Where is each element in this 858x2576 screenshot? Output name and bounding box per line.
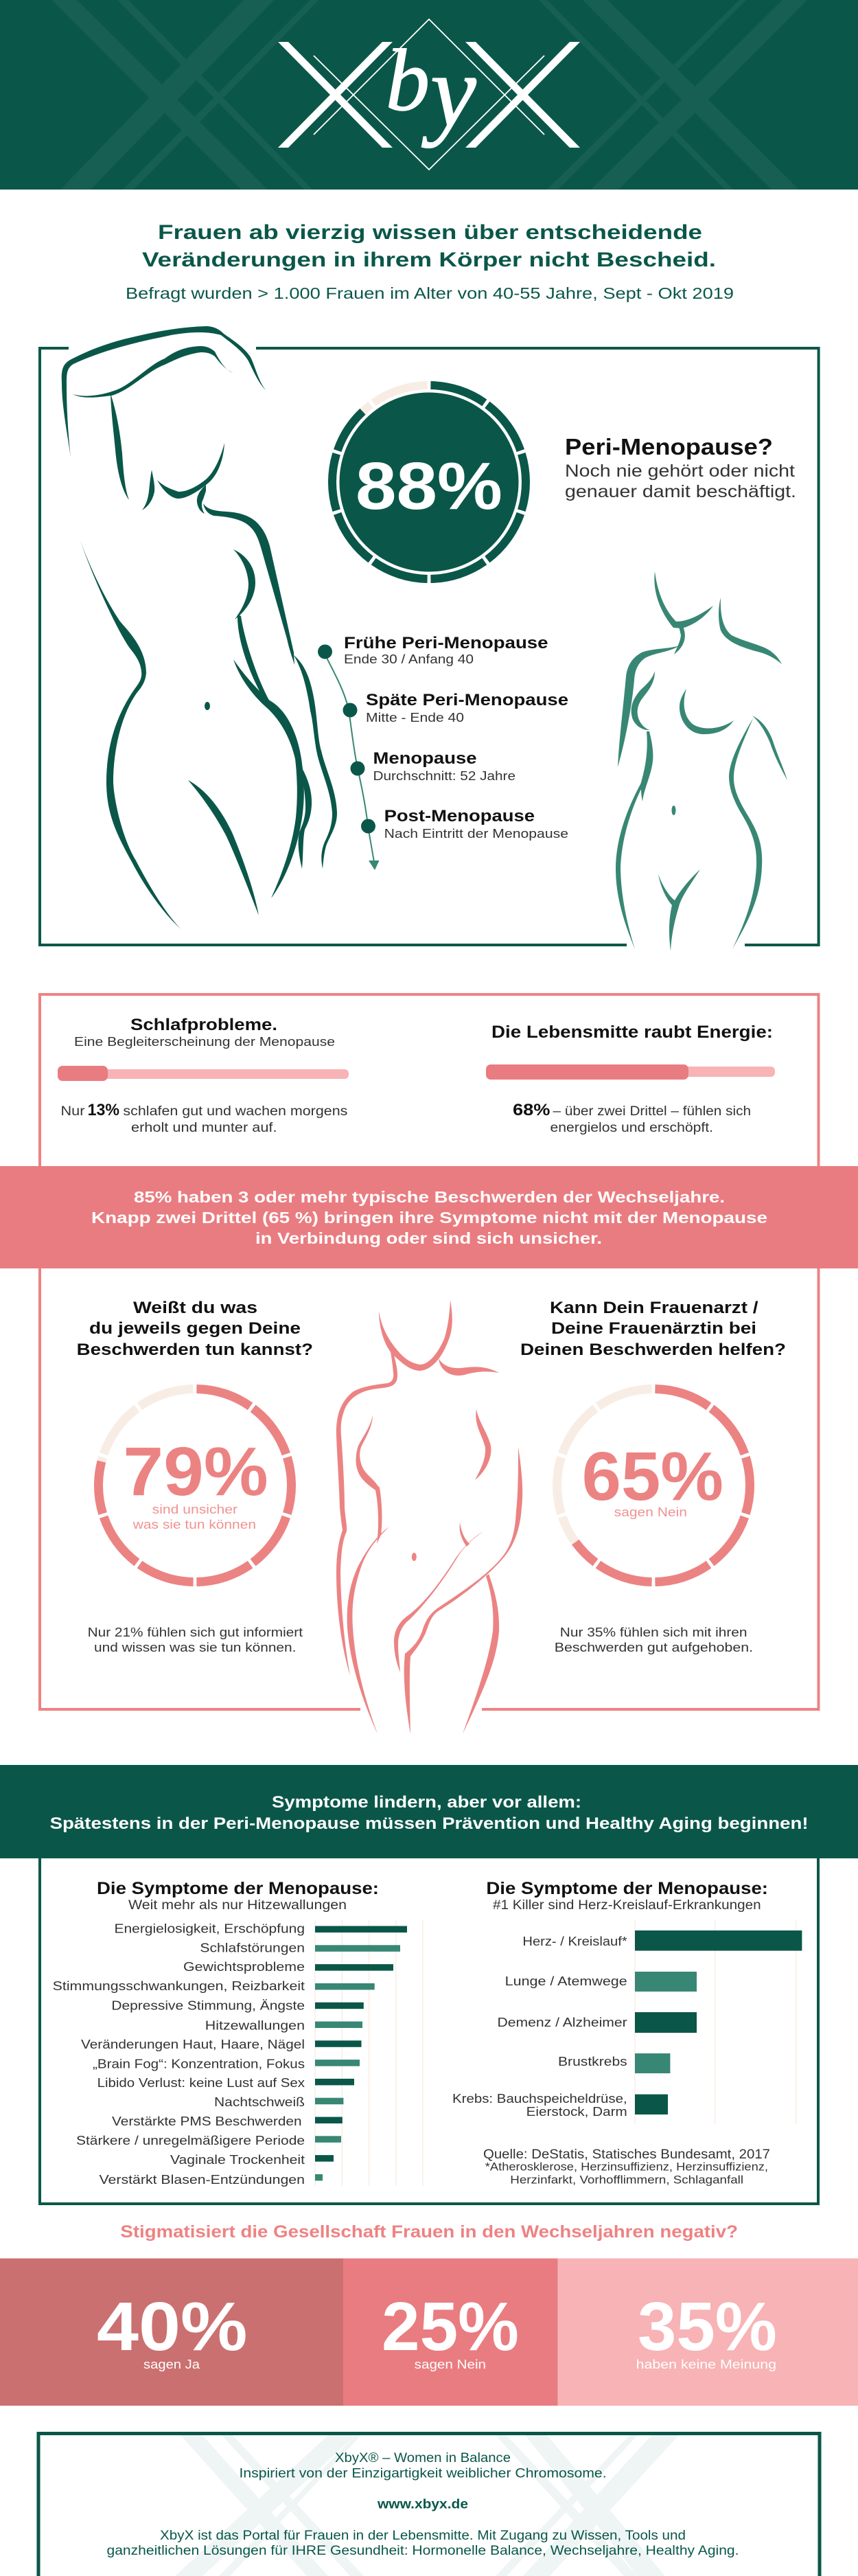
chart: Killer: Herz- / Kreislauf* — [522, 1935, 627, 1948]
question right: Kann Dein Frauenarzt / — [550, 1299, 758, 1317]
chart: Killer: #1 Killer sind Herz-Kreislauf-Erkrankungen — [493, 1898, 761, 1913]
question left: du jeweils gegen Deine — [89, 1319, 301, 1338]
banner: 85%: Knapp zwei Drittel (65 %) bringen ihre Symptome nicht mit der Menopause — [91, 1209, 767, 1227]
banner: Symptome lindern: Spätestens in der Peri-Menopause müssen Prävention und Healthy Aging beginnen! — [50, 1814, 809, 1833]
timeline: Durchschnitt: 52 Jahre — [373, 768, 515, 783]
footer text — [107, 2451, 739, 2558]
donut: 79% — [99, 1389, 291, 1582]
banner: Symptome lindern — [0, 1765, 858, 1858]
chart: Symptome der Menopause: Stimmungsschwankungen, Reizbarkeit — [53, 1979, 305, 1993]
timeline — [318, 634, 568, 870]
question left: Weißt du was — [133, 1299, 257, 1317]
note left: und wissen was sie tun können. — [94, 1641, 296, 1654]
block: Lebensmitte: Die Lebensmitte raubt Energie: — [491, 1023, 773, 1042]
donut: 79%: 79% — [123, 1433, 268, 1510]
timeline: Mitte - Ende 40 — [366, 710, 464, 725]
banner: 85%: 85% haben 3 oder mehr typische Beschwerden der Wechseljahre. — [134, 1188, 725, 1206]
timeline: Nach Eintritt der Menopause — [384, 826, 568, 841]
stat blocks — [0, 2258, 858, 2406]
title — [142, 221, 716, 271]
question right: Deine Frauenärztin bei — [551, 1319, 756, 1338]
chart: Symptome der Menopause: Stärkere / unregelmäßigere Periode — [76, 2134, 305, 2147]
chart: Symptome der Menopause: Verstärkte PMS Beschwerden — [112, 2115, 302, 2128]
block: 40%: 40% — [97, 2288, 247, 2365]
donut: 79%: sind unsicher — [152, 1503, 237, 1516]
timeline: Menopause — [373, 749, 476, 768]
chart: Symptome der Menopause: Verstärkt Blasen-Entzündungen — [99, 2173, 305, 2187]
chart: Symptome der Menopause: „Brain Fog“: Konzentration, Fokus — [93, 2057, 305, 2071]
chart: Killer: Eierstock, Darm — [526, 2105, 627, 2119]
timeline: Frühe Peri-Menopause — [344, 634, 548, 652]
banner: Symptome lindern: Symptome lindern, aber vor allem: — [272, 1793, 581, 1812]
panel: footer — [38, 2434, 820, 2576]
panel: pink frame — [0, 994, 858, 1734]
source note — [483, 2147, 770, 2187]
subtitle: Befragt wurden > 1.000 Frauen im Alter von 40-55 Jahre, Sept - Okt 2019 — [126, 284, 734, 302]
chart: Symptome der Menopause: Energielosigkeit, Erschöpfung — [114, 1922, 305, 1935]
block: Lebensmitte: energielos und erschöpft. — [550, 1121, 713, 1135]
footer text: Inspiriert von der Einzigartigkeit weiblicher Chromosome. — [239, 2467, 607, 2481]
block: Lebensmitte: – über zwei Drittel – fühlen sich — [553, 1104, 751, 1119]
question right: Deinen Beschwerden helfen? — [520, 1341, 786, 1359]
note left: Nur 21% fühlen sich gut informiert — [88, 1626, 303, 1639]
banner: 85%: in Verbindung oder sind sich unsicher. — [255, 1229, 602, 1247]
block: Schlafprobleme: schlafen gut und wachen morgens — [123, 1104, 347, 1119]
block: Schlafprobleme: erholt und munter auf. — [131, 1121, 277, 1135]
donut: 79%: was sie tun können — [132, 1518, 256, 1531]
block: Lebensmitte: 68% — [513, 1101, 550, 1119]
footer text: XbyX® – Women in Balance — [335, 2451, 511, 2465]
chart: Symptome der Menopause: Depressive Stimmung, Ängste — [111, 1998, 305, 2012]
panel: symptom charts — [40, 1858, 818, 2204]
illustration: green figure — [62, 326, 337, 929]
logo: XbyX — [278, 19, 580, 170]
block: 35%: 35% — [638, 2288, 777, 2365]
donut: 65%: 65% — [582, 1438, 723, 1515]
block: Schlafprobleme: Eine Begleiterscheinung der Menopause — [74, 1035, 335, 1049]
donut: 88%: 88% — [356, 448, 502, 523]
chart: Killer: Die Symptome der Menopause: — [486, 1879, 768, 1898]
chart: Symptome der Menopause: Veränderungen Haut, Haare, Nägel — [81, 2038, 305, 2051]
illustration: teal figure — [616, 571, 787, 951]
block: 25%: 25% — [382, 2288, 519, 2365]
chart: Symptome der Menopause: Nachtschweiß — [214, 2095, 305, 2109]
chart: Symptome der Menopause: Schlafstörungen — [200, 1941, 305, 1955]
chart: Symptome der Menopause: Hitzewallungen — [205, 2019, 305, 2033]
footer text: www.xbyx.de — [377, 2498, 468, 2512]
source note: Herzinfarkt, Vorhofflimmern, Schlaganfall — [510, 2174, 743, 2187]
timeline: Post-Menopause — [384, 807, 535, 825]
illustration: pink figure — [336, 1300, 522, 1734]
panel: peri-menopause — [40, 326, 819, 951]
donut: 88% — [332, 385, 526, 579]
block: Lebensmitte — [486, 1023, 775, 1135]
logo: XbyX: y — [421, 34, 476, 148]
chart: Killer: Demenz / Alzheimer — [497, 2016, 627, 2029]
text: peri-menopause question: Noch nie gehört oder nicht — [565, 461, 795, 481]
chart: Symptome der Menopause — [53, 1879, 423, 2187]
block: Schlafprobleme: 13% — [88, 1101, 119, 1119]
block: 35% — [558, 2258, 858, 2406]
heading: Stigmatisiert: Stigmatisiert die Gesellschaft Frauen in den Wechseljahren negativ? — [120, 2222, 738, 2242]
block: Schlafprobleme: Schlafprobleme. — [130, 1016, 277, 1034]
chart: Symptome der Menopause: Vaginale Trockenheit — [170, 2153, 305, 2167]
donut: 65%: sagen Nein — [614, 1505, 687, 1519]
text: peri-menopause question — [565, 434, 796, 501]
block: 40% — [0, 2258, 343, 2406]
donut: 65% — [557, 1389, 750, 1582]
chart: Killer: Brustkrebs — [558, 2055, 627, 2068]
source note: *Atherosklerose, Herzinsuffizienz, Herzinsuffizienz, — [485, 2161, 768, 2174]
title: Veränderungen in ihrem Körper nicht Bescheid. — [142, 249, 716, 271]
header band with logo — [0, 0, 858, 190]
footer text: ganzheitlichen Lösungen für IHRE Gesundheit: Hormonelle Balance, Wechseljahre, Healthy Aging. — [107, 2544, 739, 2558]
note right: Nur 35% fühlen sich mit ihren — [560, 1626, 747, 1639]
title: Frauen ab vierzig wissen über entscheidende — [158, 221, 702, 244]
chart: Symptome der Menopause: Weit mehr als nur Hitzewallungen — [128, 1898, 347, 1913]
timeline: Ende 30 / Anfang 40 — [344, 652, 474, 666]
block: Schlafprobleme — [58, 1016, 349, 1135]
question left — [77, 1299, 313, 1359]
question right — [520, 1299, 786, 1359]
banner: 85% — [0, 1166, 858, 1268]
chart: Symptome der Menopause: Gewichtsprobleme — [183, 1960, 305, 1974]
source note: Quelle: DeStatis, Statisches Bundesamt, 2017 — [483, 2147, 770, 2162]
note right — [555, 1626, 753, 1654]
text: peri-menopause question: genauer damit beschäftigt. — [565, 482, 796, 501]
chart: Killer — [452, 1879, 802, 2124]
text: peri-menopause question: Peri-Menopause? — [565, 434, 773, 459]
question left: Beschwerden tun kannst? — [77, 1341, 313, 1359]
footer text: XbyX ist das Portal für Frauen in der Lebensmitte. Mit Zugang zu Wissen, Tools und — [160, 2529, 686, 2543]
chart: Symptome der Menopause: Die Symptome der Menopause: — [97, 1879, 379, 1898]
timeline: Späte Peri-Menopause — [366, 691, 568, 709]
chart: Symptome der Menopause: Libido Verlust: keine Lust auf Sex — [97, 2076, 305, 2090]
block: 35%: haben keine Meinung — [636, 2357, 776, 2371]
block: 40%: sagen Ja — [143, 2357, 200, 2371]
block: 25% — [343, 2258, 558, 2406]
note left — [88, 1626, 303, 1654]
block: 25%: sagen Nein — [415, 2357, 486, 2371]
logo: XbyX: b — [386, 32, 430, 129]
block: Schlafprobleme: Nur — [60, 1104, 85, 1119]
chart: Killer: Krebs: Bauchspeicheldrüse, — [452, 2092, 627, 2106]
note right: Beschwerden gut aufgehoben. — [555, 1641, 753, 1654]
chart: Killer: Lunge / Atemwege — [505, 1974, 627, 1988]
